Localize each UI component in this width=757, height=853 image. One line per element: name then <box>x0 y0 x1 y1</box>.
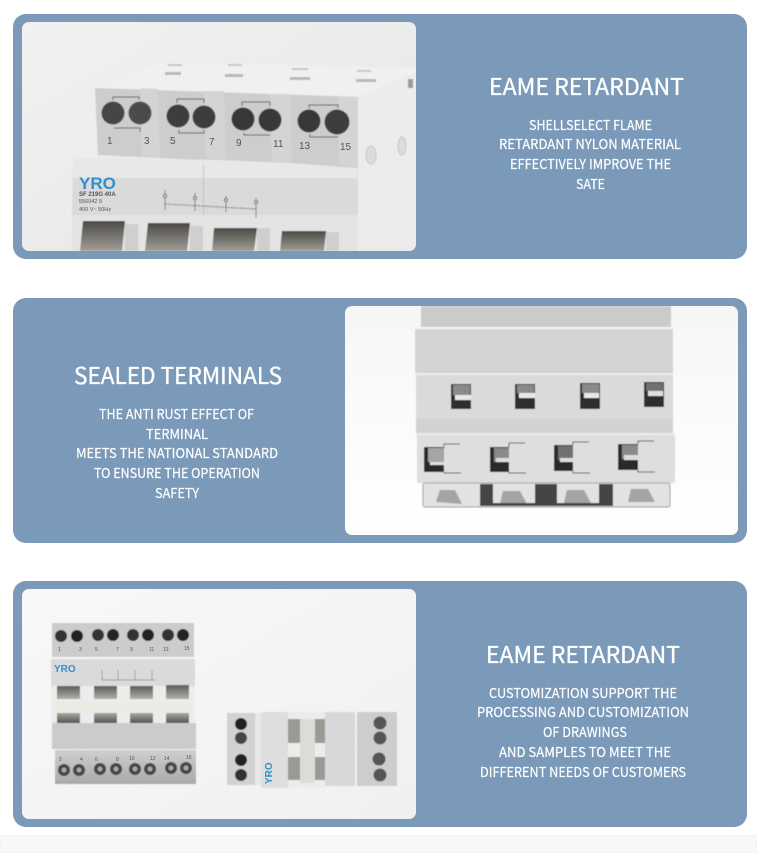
product photo: switch terminals close-up: 3 <box>144 136 150 147</box>
product photo: switch terminals close-up: 13 <box>299 141 311 152</box>
product photo: switch terminals close-up: 9 <box>236 138 242 149</box>
product photo: switch terminals close-up: 15 <box>340 142 352 153</box>
product photo: two switches: YRO <box>264 762 275 784</box>
description text: SHELLSELECT FLAME <box>529 114 652 134</box>
description text: PROCESSING AND CUSTOMIZATION <box>477 701 689 721</box>
product photo: two switches: 9 <box>130 647 133 653</box>
description text: CUSTOMIZATION SUPPORT THE <box>489 682 677 702</box>
description text: THE ANTI RUST EFFECT OF <box>99 403 255 423</box>
product photo: two switches: 11 <box>149 647 154 653</box>
product photo: two switches: 8 <box>116 757 119 763</box>
description text: AND SAMPLES TO MEET THE <box>499 741 671 761</box>
product photo: two switches: 4 <box>80 757 83 763</box>
description text: MEETS THE NATIONAL STANDARD <box>76 442 278 462</box>
product photo: switch terminals close-up: 1 <box>107 136 113 147</box>
product photo: two switches: 3 <box>79 647 82 653</box>
description text: OF DRAWINGS <box>543 721 627 741</box>
product photo: two switches: 16 <box>186 755 192 761</box>
description text <box>76 403 278 502</box>
panel: customization <box>13 581 747 827</box>
product photo: switch side view <box>345 306 738 535</box>
bottom strip <box>0 836 757 853</box>
product photo: switch terminals close-up: 400 V~ 50Hz <box>79 207 111 213</box>
description text <box>477 682 689 781</box>
product photo: switch terminals close-up: 11 <box>273 139 284 150</box>
product photo: two switches: 15 <box>184 646 190 652</box>
product photo: switch terminals close-up: 5 <box>170 136 176 147</box>
panel: flame retardant <box>13 14 747 259</box>
description text: SAFETY <box>155 482 200 502</box>
description text: SATE <box>576 173 605 193</box>
product photo: two switches: 6 <box>95 757 98 763</box>
product photo: switch terminals close-up: SF 219G 40A <box>79 192 116 198</box>
description text: TERMINAL <box>146 423 208 443</box>
product photo: two switches: 1 <box>58 647 61 653</box>
panel background <box>13 14 747 259</box>
description text <box>499 114 681 193</box>
heading: EAME RETARDANT <box>486 636 680 670</box>
description text: DIFFERENT NEEDS OF CUSTOMERS <box>480 761 686 781</box>
panel background <box>13 298 747 543</box>
product photo: two switches: 12 <box>150 756 156 762</box>
product photo: switch terminals close-up: 7 <box>209 137 215 148</box>
product photo: two switches: YRO <box>54 664 76 675</box>
panel: sealed terminals <box>13 298 747 543</box>
product photo: switch terminals close-up: 556942 9 <box>79 199 102 205</box>
product photo: two switches <box>22 589 416 819</box>
description text: RETARDANT NYLON MATERIAL <box>499 133 681 153</box>
heading: EAME RETARDANT <box>489 68 684 102</box>
product photo: two switches: 2 <box>59 757 62 763</box>
description text: TO ENSURE THE OPERATION <box>94 462 260 482</box>
description text: EFFECTIVELY IMPROVE THE <box>510 153 671 173</box>
product photo: two switches: 13 <box>163 647 169 653</box>
heading: SEALED TERMINALS <box>74 357 282 391</box>
panel background <box>13 581 747 827</box>
product photo: two switches: 10 <box>129 756 135 762</box>
product photo: two switches: 7 <box>116 647 119 653</box>
product photo: two switches: 14 <box>164 756 170 762</box>
product photo: switch terminals close-up <box>22 22 416 251</box>
product photo: switch terminals close-up: YRO <box>79 174 116 193</box>
product photo: two switches: 5 <box>95 647 98 653</box>
